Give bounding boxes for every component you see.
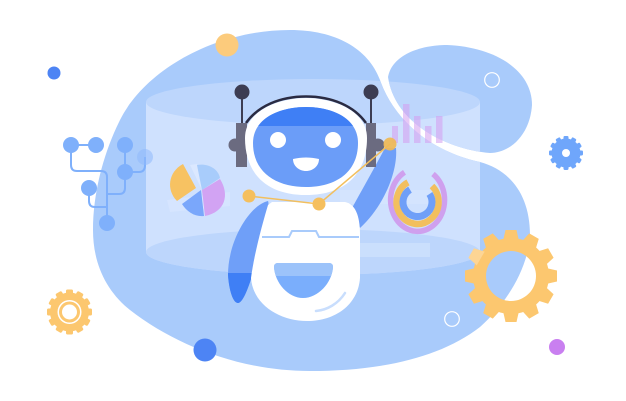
network diagram xyxy=(63,137,153,231)
ear pieces xyxy=(228,123,384,167)
antennas xyxy=(234,84,378,125)
pie chart xyxy=(170,164,225,216)
robot left arm xyxy=(228,201,268,303)
decorative ring: lower xyxy=(445,312,459,326)
decorative dot: yellow xyxy=(216,34,238,56)
decorative dot: blue small xyxy=(48,66,60,80)
gear: small yellow xyxy=(47,290,92,334)
decorative dot: purple xyxy=(549,339,565,355)
glass cylinder xyxy=(146,79,480,275)
robot right arm xyxy=(352,148,396,228)
illustration: robot with data charts xyxy=(47,30,583,371)
robot body xyxy=(251,202,360,321)
headband xyxy=(246,96,366,123)
gear: blue xyxy=(549,136,583,170)
body highlight xyxy=(316,293,345,311)
gear: large yellow xyxy=(465,230,557,322)
eyes xyxy=(270,132,341,148)
donut chart xyxy=(391,172,445,231)
mouth xyxy=(293,158,319,171)
body pocket xyxy=(274,263,333,298)
connector line with nodes xyxy=(242,138,396,210)
robot head xyxy=(245,98,367,195)
robot xyxy=(228,84,396,321)
body collar line xyxy=(262,231,359,237)
background blob: main xyxy=(93,30,530,371)
robot face xyxy=(253,107,358,187)
background blob: upper right xyxy=(388,45,532,153)
decorative ring: upper xyxy=(485,73,499,87)
decorative dot: blue large xyxy=(194,338,216,362)
bar chart xyxy=(392,104,442,143)
